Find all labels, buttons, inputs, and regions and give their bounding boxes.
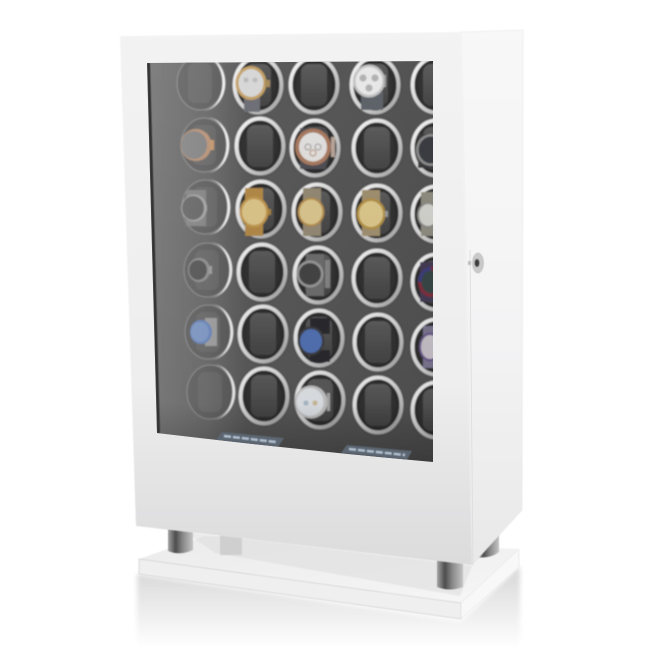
watch: row 3 column 3, two tone xyxy=(298,188,324,236)
winder rings: column 3 xyxy=(287,54,347,431)
door seam xyxy=(470,250,473,565)
watch: row 5 column 1, blue xyxy=(190,318,217,346)
cabinet side panel xyxy=(461,30,523,565)
lock xyxy=(468,253,484,273)
cabinet shadow on base xyxy=(185,532,472,596)
watch: row 4 column 5, red and blue bezel xyxy=(417,261,433,303)
watch: row 6 column 3, white dial xyxy=(294,380,331,418)
watch: row 1 column 2, gold and silver xyxy=(236,66,270,112)
floor reflection xyxy=(137,566,520,648)
base plinth xyxy=(139,532,519,619)
glass reflection wash xyxy=(147,62,230,440)
glass window xyxy=(147,61,433,462)
watch: row 1 column 4, white chronograph xyxy=(353,64,386,110)
watch: row 2 column 1, rose gold xyxy=(180,129,214,161)
watch: row 4 column 3, steel dark dial xyxy=(296,254,330,296)
foot: front left xyxy=(168,515,193,553)
winder rings: column 4 xyxy=(348,54,405,436)
winder rings: column 1 (reflected) xyxy=(177,55,235,420)
cabinet front panel xyxy=(120,32,472,565)
brand plate: left xyxy=(216,432,284,447)
brand plate: right xyxy=(341,445,412,460)
watch: row 3 column 5, silver xyxy=(416,190,433,238)
base right edge xyxy=(461,549,519,619)
watch: row 5 column 3, blue dial xyxy=(298,318,330,362)
watch: row 2 column 5, dark dial xyxy=(415,133,433,169)
winder rings: column 2 xyxy=(231,54,291,427)
glass left dark edge xyxy=(147,63,160,433)
foot: reflected back left xyxy=(220,530,242,555)
foot: front right xyxy=(437,550,463,590)
glass bottom shading xyxy=(156,262,433,462)
watch: row 3 column 4, gold cream xyxy=(356,190,388,236)
watch: row 5 column 5, multicolour xyxy=(418,325,433,370)
base front edge xyxy=(139,559,461,619)
product photo: watch winder cabinet xyxy=(120,30,524,631)
watch: row 3 column 1, steel xyxy=(181,190,207,226)
watch: row 3 column 2, gold xyxy=(240,188,271,236)
watch: row 2 column 3, rose gold white dial xyxy=(295,128,335,169)
winder rings: column 5 xyxy=(410,61,433,440)
watch: row 4 column 1, dark xyxy=(188,258,212,282)
base top surface xyxy=(139,536,519,603)
foot: back right xyxy=(477,520,499,557)
